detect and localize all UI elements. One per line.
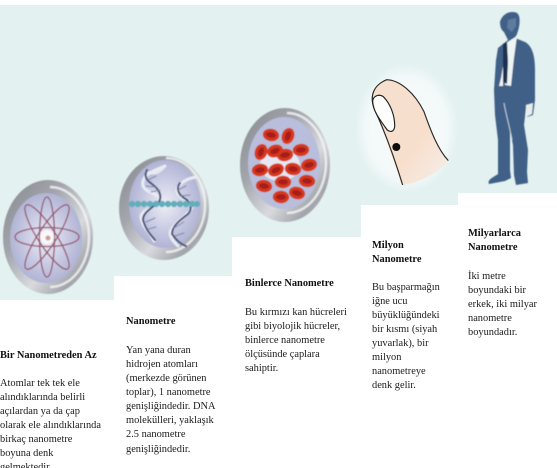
text block: nanometre: Yan yana duran [126, 345, 192, 356]
text block: nanometre: molekülleri, yaklaşık [126, 415, 215, 426]
text block: milyon nanometre: milyon [372, 352, 402, 363]
text block: milyon nanometre [372, 240, 441, 391]
text block: nanometre: genişliğindedir. DNA [126, 401, 216, 412]
text block: binlerce nanometre: Binlerce Nanometre [245, 278, 334, 289]
text block: bir nanometreden az [0, 350, 101, 468]
text block: bir nanometreden az: Atomlar tek tek ele [0, 378, 80, 389]
icon: standing man silhouette [489, 12, 535, 185]
text block: bir nanometreden az: birkaç nanometre [0, 434, 73, 445]
text block: binlerce nanometre: binlerce nanometre [245, 335, 325, 346]
text block: milyarlarca nanometre [468, 228, 537, 338]
text block: binlerce nanometre: gibi biyolojik hücreler, [245, 321, 340, 332]
text block: milyon nanometre: büyüklüğündeki [372, 310, 440, 321]
stepped background [0, 5, 557, 300]
text block: milyarlarca nanometre: İki metre [468, 270, 506, 282]
text block: bir nanometreden az: açılardan ya da çap [0, 406, 80, 417]
text block: milyarlarca nanometre: boyundaki bir [468, 285, 527, 296]
text block: nanometre: hidrojen atomları [126, 359, 198, 370]
text block: nanometre [126, 316, 216, 455]
text block: binlerce nanometre: Bu kırmızı kan hücreleri [245, 307, 347, 318]
icon: DNA and hydrogen atoms in dish [119, 156, 209, 260]
text block: bir nanometreden az: olarak ele alındıklarında [0, 420, 101, 431]
icon: thumb with pin-sized dot [355, 63, 458, 193]
text block: binlerce nanometre [245, 278, 347, 374]
text block: milyarlarca nanometre: boyundadır. [468, 327, 517, 338]
text block: binlerce nanometre: sahiptir. [245, 363, 278, 374]
text block: milyon nanometre: bir kısmı (siyah [372, 324, 438, 335]
text block: milyon nanometre: Bu başparmağın [372, 282, 441, 293]
text block: milyon nanometre: yuvarlak), bir [372, 338, 429, 349]
text block: milyon nanometre: denk gelir. [372, 380, 416, 391]
text block: milyarlarca nanometre: nanometre [468, 313, 512, 324]
text block: bir nanometreden az: Bir Nanometreden Az [0, 350, 97, 361]
text block: nanometre: 2.5 nanometre [126, 429, 186, 440]
text block: milyon nanometre: Nanometre [372, 254, 422, 265]
text block: milyon nanometre: iğne ucu [372, 296, 408, 307]
text block: binlerce nanometre: ölçüsünde çaplara [245, 349, 320, 360]
text block: nanometre: (merkezde görünen [126, 373, 207, 384]
text block: milyon nanometre: nanometreye [372, 366, 426, 377]
text block: milyarlarca nanometre: Milyarlarca [468, 228, 522, 239]
text block: nanometre: Nanometre [126, 316, 176, 327]
icon: atom in dish [3, 180, 93, 294]
text block: milyarlarca nanometre: Nanometre [468, 242, 518, 253]
text block: bir nanometreden az: boyuna denk [0, 448, 54, 459]
text block: milyarlarca nanometre: erkek, iki milyar [468, 299, 537, 310]
text block: bir nanometreden az: alındıklarında belirli [0, 392, 85, 403]
text block: nanometre: genişliğindedir. [126, 444, 190, 455]
text block: nanometre: toplar), 1 nanometre [126, 387, 211, 398]
icon: red blood cells in dish [240, 108, 330, 222]
text block: milyon nanometre: Milyon [372, 240, 404, 251]
